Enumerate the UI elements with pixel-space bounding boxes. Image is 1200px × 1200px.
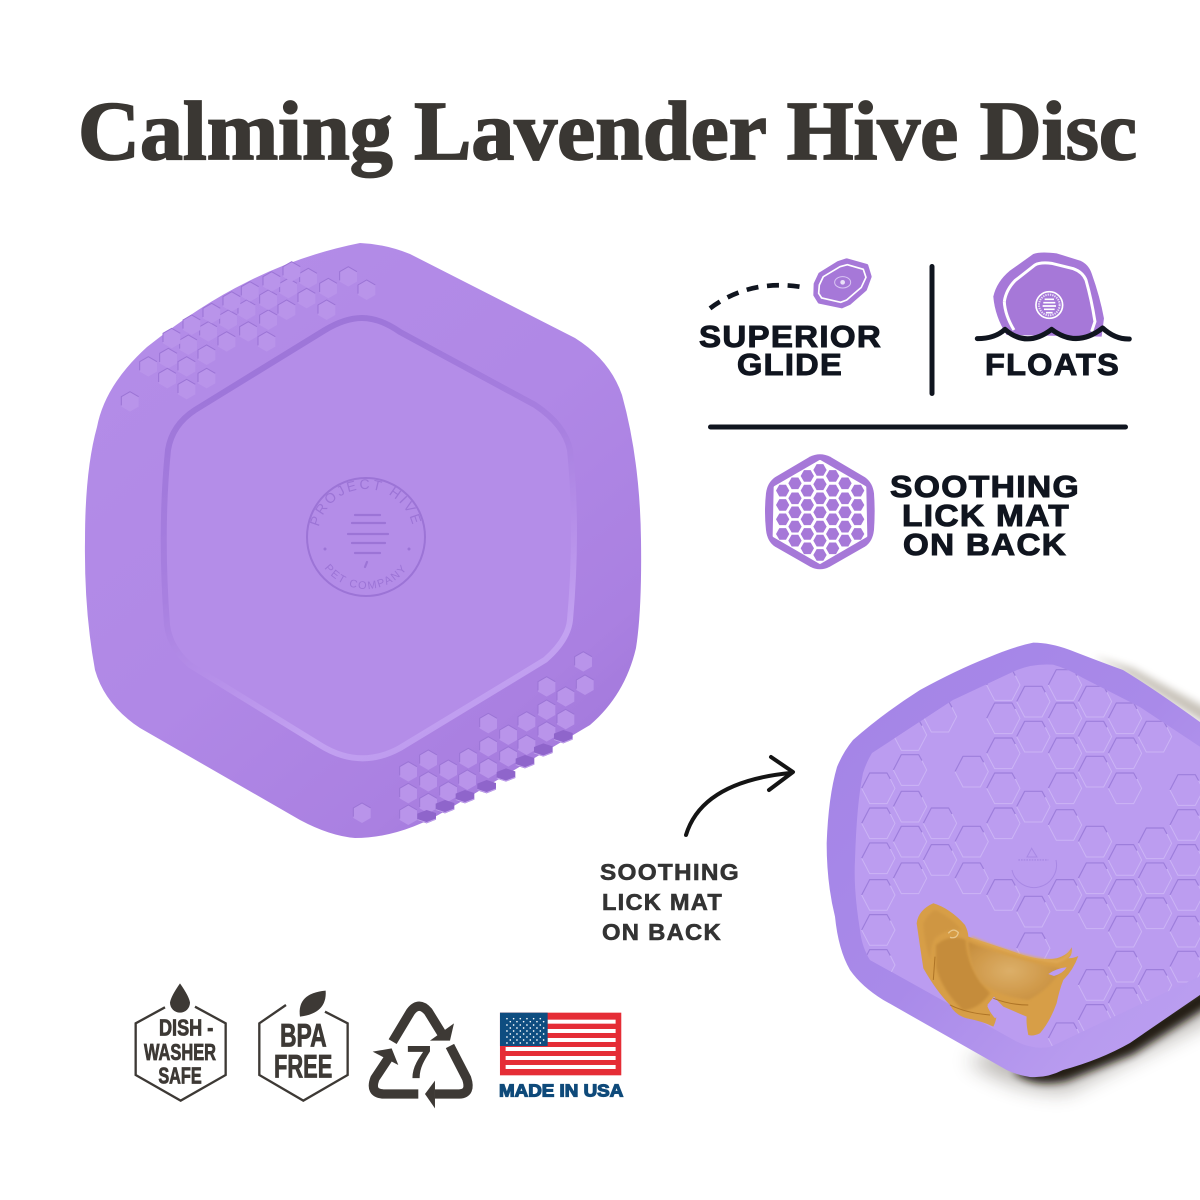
soft wide shadow — [967, 963, 1200, 1092]
label: soothing lick mat: ON BACK — [903, 528, 1067, 562]
embossed Project Hive medallion: PET COMPANY — [325, 564, 404, 589]
tail notch — [1048, 967, 1067, 976]
label: floats: FLOATS — [985, 348, 1120, 382]
badge: BPA free: BPA — [280, 1018, 327, 1054]
callout: soothing lick mat on back: LICK MAT — [602, 889, 723, 915]
label: superior glide: SUPERIOR — [699, 320, 882, 354]
disc inner face — [855, 664, 1200, 1048]
embossed Project Hive medallion: PROJECT HIVE — [310, 479, 422, 526]
icon: superior glide — [710, 260, 870, 308]
label: superior glide — [699, 320, 882, 382]
badge: BPA free: FREE — [274, 1048, 332, 1084]
title: Calming Lavender Hive Disc — [78, 85, 1137, 178]
center recycling stamp — [1012, 848, 1057, 888]
vertical divider — [930, 264, 934, 396]
badge: recycling 7: 7 — [406, 1036, 432, 1087]
lick mat honeycomb — [862, 670, 1200, 1054]
swirl — [948, 930, 958, 938]
hole — [987, 1000, 1003, 1018]
callout: soothing lick mat on back: ON BACK — [602, 919, 722, 945]
arrow to lick mat — [686, 757, 793, 835]
badge: BPA free — [259, 991, 348, 1101]
peanut butter smear — [917, 903, 1078, 1036]
dark contact shadow — [1013, 983, 1200, 1083]
label: soothing lick mat: LICK MAT — [902, 499, 1070, 533]
horizontal divider — [708, 424, 1128, 430]
badge: made in USA flag: MADE IN USA — [499, 1081, 624, 1101]
badge: made in USA flag — [499, 1013, 624, 1101]
leaf — [300, 991, 326, 1017]
icon: floats — [977, 252, 1129, 339]
callout: soothing lick mat on back: SOOTHING — [600, 859, 740, 885]
badge: dishwasher safe: WASHER — [144, 1039, 216, 1065]
back of disc with peanut butter — [827, 643, 1200, 1092]
label: soothing lick mat: SOOTHING — [890, 470, 1080, 504]
label: superior glide: GLIDE — [737, 348, 843, 382]
callout: soothing lick mat on back — [600, 859, 740, 945]
label: soothing lick mat — [890, 470, 1080, 562]
disc body — [85, 243, 641, 838]
badge: dishwasher safe: DISH - — [159, 1015, 213, 1041]
main disc product — [84, 243, 642, 838]
water drop — [170, 983, 190, 1013]
badge: dishwasher safe — [136, 983, 226, 1101]
honeycomb texture upper left — [121, 262, 375, 412]
badge: dishwasher safe: SAFE — [158, 1062, 202, 1088]
honeycomb texture lower right — [353, 652, 594, 825]
badge: recycling 7 — [373, 1006, 468, 1108]
embossed Project Hive medallion — [306, 477, 426, 597]
disc rim — [827, 643, 1200, 1077]
icon: lick mat — [765, 454, 875, 569]
inner raised panel — [164, 318, 574, 758]
upper right shadow — [1093, 657, 1200, 727]
